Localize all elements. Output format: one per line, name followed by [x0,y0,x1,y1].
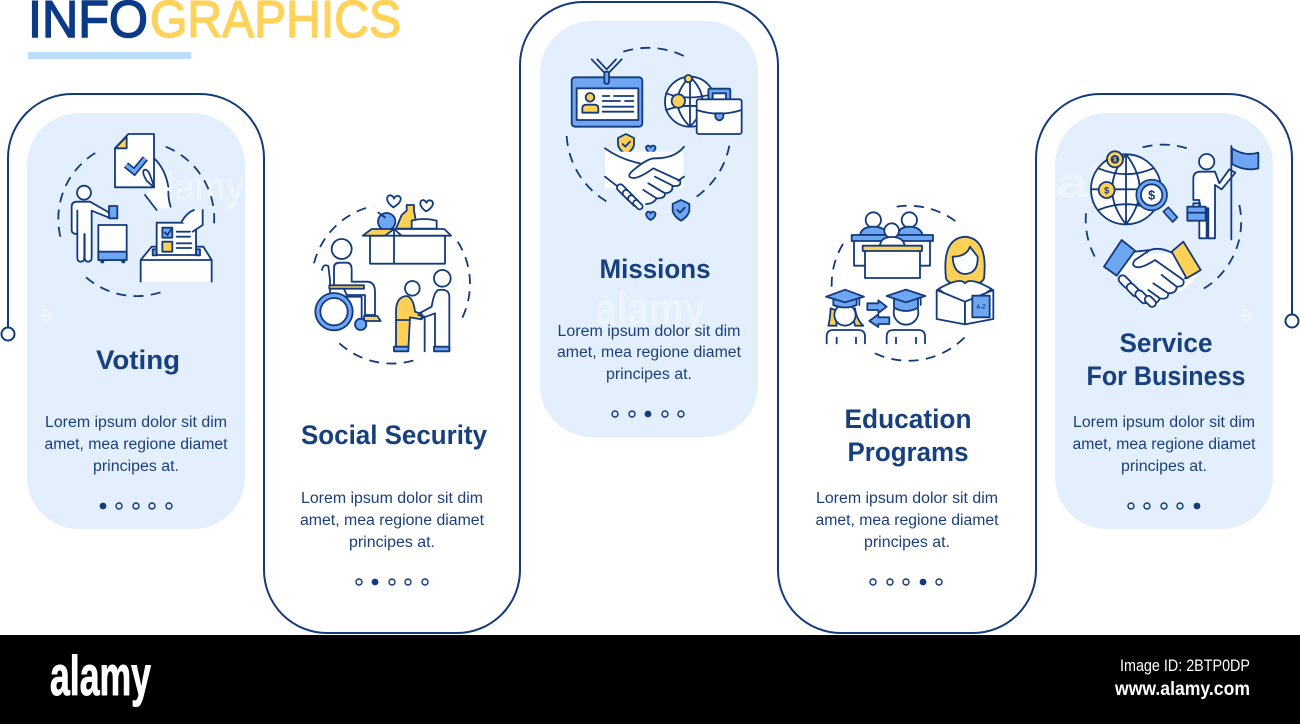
body text: Lorem ipsum dolor sit dim [1073,414,1255,431]
body text: Lorem ipsum dolor sit dim [301,490,483,507]
pagination dots [100,503,172,509]
pagination dots [870,579,942,585]
icon: service for business: $ [1104,185,1110,195]
pagination dots [612,411,684,417]
body text: principes at. [349,534,435,551]
body text [1072,414,1256,475]
body text: amet, mea regione diamet [300,512,485,529]
body text [557,323,742,383]
icon: service for business [1086,145,1258,308]
body text: Lorem ipsum dolor sit dim [816,490,998,507]
watermark fragments [1056,158,1254,328]
heading: Service For Business: Service [1120,328,1212,358]
body text: principes at. [864,534,950,551]
body text: amet, mea regione diamet [557,344,742,361]
icon: social security [314,195,470,364]
watermark fragments: ala [1056,158,1137,207]
watermark fragment: alamy [595,283,705,335]
pagination dots [1128,503,1200,509]
heading: Service For Business [1086,328,1246,391]
panel: voting [27,113,246,529]
logo: INFOGRAPHICS [28,0,401,59]
watermark fragments: a [40,301,54,328]
heading: Education Programs: Education [844,404,972,434]
icon: service for business: $ [1148,188,1155,202]
icon: service for business: $ [1113,157,1117,164]
footer url: www.alamy.com [1114,679,1250,700]
icon: missions [567,48,742,221]
icon: education programs [826,206,993,361]
body text [44,414,228,475]
watermark fragments: lamy [165,165,246,209]
heading: Service For Business: For Business [1086,361,1246,391]
body text: amet, mea regione diamet [1072,436,1256,453]
body text: amet, mea regione diamet [44,436,228,453]
body text [300,490,485,551]
heading: Social Security: Social Security [301,420,487,450]
icon: voting [58,134,214,296]
watermark fragments [40,165,246,328]
icon: education programs: A-Z [976,305,986,311]
footer bar [0,635,1300,724]
footer logo: alamy: alamy [50,644,151,707]
body text: Lorem ipsum dolor sit dim [558,323,740,340]
body text: amet, mea regione diamet [816,512,999,529]
body text: principes at. [93,458,179,475]
body text: Lorem ipsum dolor sit dim [45,414,227,431]
body text: principes at. [606,366,692,383]
pagination dots [356,579,428,585]
panel: education programs [816,206,999,585]
footer image id: Image ID: 2BTP0DP [1120,656,1250,675]
heading: Missions: Missions [600,254,710,284]
heading: Education Programs [844,404,972,467]
watermark fragments: a [1240,301,1254,328]
panel: social security [300,195,487,585]
panel: service for business [1055,113,1273,529]
body text [816,490,999,551]
heading: Voting: Voting [96,345,180,375]
heading: Education Programs: Programs [848,437,968,467]
panel: missions [540,21,758,437]
body text: principes at. [1121,458,1207,475]
